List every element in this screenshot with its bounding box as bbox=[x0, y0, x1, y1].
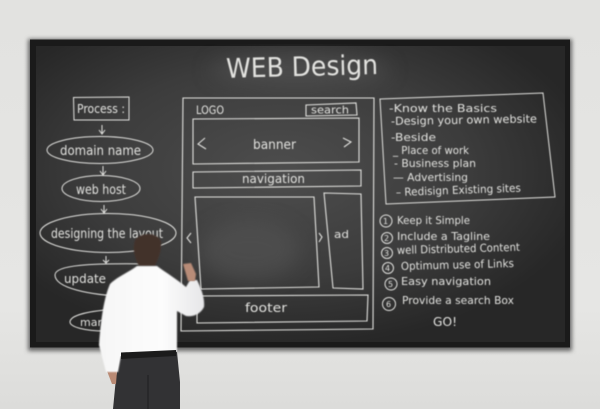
panel: basics list: -Design your own website bbox=[391, 112, 537, 128]
step: domain name: domain name bbox=[60, 144, 141, 159]
footer bbox=[197, 295, 368, 323]
tip 2: Include a Tagline bbox=[397, 230, 490, 243]
arrow bbox=[101, 205, 107, 213]
tip 6: 6 bbox=[386, 300, 391, 309]
go: GO! bbox=[433, 315, 457, 329]
step: update: update bbox=[64, 272, 106, 286]
panel: process flowchart bbox=[40, 97, 176, 331]
title: WEB Design bbox=[226, 50, 378, 85]
navigation: navigation bbox=[242, 172, 305, 186]
tip 4: 4 bbox=[385, 264, 390, 273]
panel: basics list bbox=[380, 93, 555, 204]
step: designing the layout: designing the layout bbox=[51, 227, 163, 242]
panel: basics list: -Beside bbox=[391, 131, 436, 144]
search box: search bbox=[311, 104, 349, 116]
tip 3: well Distributed Content bbox=[397, 241, 521, 257]
belt bbox=[121, 350, 176, 359]
tip 6 bbox=[382, 294, 514, 310]
writing hand bbox=[183, 263, 196, 281]
ad: ad bbox=[334, 228, 349, 241]
panel: basics list: -Know the Basics bbox=[389, 102, 497, 115]
step: web host bbox=[62, 176, 140, 202]
main content box bbox=[187, 197, 322, 289]
banner bbox=[193, 118, 359, 164]
step: domain name bbox=[47, 136, 153, 164]
tip 5: Easy navigation bbox=[401, 275, 491, 288]
chalk drawings bbox=[40, 50, 555, 331]
tip 5: 5 bbox=[388, 280, 393, 289]
arrow bbox=[99, 125, 105, 134]
tip 3: 3 bbox=[384, 249, 389, 258]
hair bbox=[134, 234, 161, 266]
tip 2: 2 bbox=[384, 234, 389, 243]
step: web host: web host bbox=[76, 183, 126, 198]
step: designing the layout bbox=[40, 214, 176, 252]
man writing on the board bbox=[99, 234, 204, 409]
outer frame bbox=[181, 98, 374, 331]
footer: footer bbox=[245, 301, 287, 315]
panel: basics list: - Business plan bbox=[394, 157, 476, 170]
ad bbox=[324, 193, 363, 289]
step: update bbox=[55, 264, 163, 297]
blackboard bbox=[28, 39, 572, 351]
panel: basics list: _ Place of work bbox=[392, 144, 470, 157]
left hand bbox=[107, 371, 117, 384]
process box bbox=[74, 97, 129, 120]
panel: basics list: – Redisign Existing sites bbox=[396, 182, 521, 199]
search box bbox=[306, 103, 357, 116]
process box: Process : bbox=[77, 102, 125, 116]
tip 6: Provide a search Box bbox=[402, 294, 514, 307]
tip 4: Optimum use of Links bbox=[401, 257, 514, 273]
step: marketing bbox=[70, 310, 105, 331]
trousers bbox=[113, 352, 180, 409]
shirt bbox=[99, 266, 204, 372]
arrow bbox=[103, 256, 109, 263]
navigation bbox=[193, 170, 361, 188]
step: marketing: mar bbox=[80, 317, 103, 329]
tip 1: 1 bbox=[383, 217, 388, 226]
panel: basics list: — Advertising bbox=[393, 171, 468, 184]
logo: LOGO bbox=[196, 103, 224, 117]
panel: numbered tips bbox=[380, 214, 521, 329]
banner: banner bbox=[253, 138, 297, 153]
panel: website wireframe bbox=[181, 98, 374, 331]
tip 1: Keep it Simple bbox=[397, 214, 470, 227]
arrow bbox=[100, 166, 106, 175]
